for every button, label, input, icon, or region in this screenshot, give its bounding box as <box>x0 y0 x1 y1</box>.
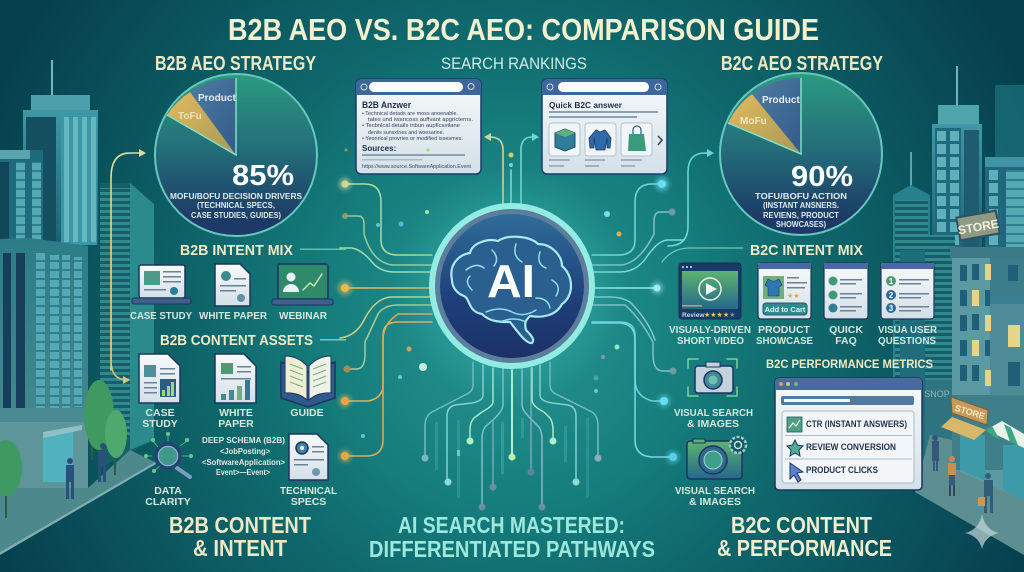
metric icon: CTR chart <box>787 417 802 432</box>
icon: quick FAQ card <box>824 263 868 319</box>
pie label: tofu: ToFu <box>178 111 202 122</box>
stat: 90%: 90% <box>791 161 853 193</box>
stat: 85%: 85% <box>232 160 294 192</box>
icon: case study laptop <box>132 265 191 304</box>
icon: white paper chart document <box>215 354 256 403</box>
footer: B2C content and performance: & PERFORMANCE <box>717 535 892 561</box>
answer bullets: • Tecbnlcal details inbun aupficsstlane <box>362 123 460 129</box>
slice: mofu <box>728 94 801 154</box>
right circuit traces <box>592 184 684 457</box>
icon: user questions card: 1 <box>889 277 894 286</box>
pie caption: MOFU/BOFU DECISION DRIVERS <box>170 192 303 201</box>
labels: B2B content assets: GUIDE <box>290 407 324 419</box>
arrow: to B2C strategy <box>668 149 714 246</box>
slice: product <box>752 78 801 154</box>
icon: case study document <box>139 354 180 403</box>
footer: AI search mastered <box>369 512 655 562</box>
left street trees and pedestrians <box>0 380 127 518</box>
pie caption: (TECHNICAL SPECS, <box>197 201 275 210</box>
labels: B2B content assets: WHITE <box>219 407 253 419</box>
icon: user questions card <box>881 263 934 319</box>
labels: visual search 2: & IMAGES <box>689 496 741 508</box>
answer bullets: tates und iwancoss auffvant apgricterns. <box>368 117 473 123</box>
labels: technical specs: TECHNICAL <box>280 485 338 497</box>
chart: B2C pie <box>720 73 882 235</box>
right city skyline <box>893 66 1024 555</box>
footer: AI search mastered: AI SEARCH MASTERED: <box>398 512 625 538</box>
labels: B2C intent mix: PRODUCT <box>758 324 811 336</box>
labels: visual search 1: & IMAGES <box>687 418 739 430</box>
labels: visual search 2 <box>675 485 755 508</box>
pie label: product: Product <box>198 93 236 104</box>
right storefront signs and awnings: STORE <box>957 217 1000 237</box>
icon: product showcase card <box>758 263 811 319</box>
labels: visual search 1: VISUAL SEARCH <box>674 407 753 419</box>
footer: AI search mastered: DIFFERENTIATED PATHWAYS <box>369 536 655 562</box>
hub ring <box>432 206 592 366</box>
sources heading: Sources: <box>362 144 396 153</box>
line: B2C intent rule <box>662 248 743 262</box>
left city skyline <box>0 60 156 555</box>
labels: B2C intent mix <box>669 324 937 347</box>
button label: Add to Cart <box>765 305 806 314</box>
arrow: to B2B strategy and content <box>111 149 146 384</box>
icon: guide open book <box>281 356 335 407</box>
answer bullets: • Technical detads are moss anoenable. <box>362 111 458 117</box>
panel heading: Quick B2C answer <box>549 100 623 110</box>
metric: product clicks: PRODUCT CLICKS <box>806 465 878 476</box>
footer: B2B content and intent: & INTENT <box>193 535 287 561</box>
icon: visual search camera with gear <box>687 437 746 479</box>
metric icon: review star <box>787 440 803 456</box>
footer: B2B content and intent: B2B CONTENT <box>169 512 311 538</box>
labels: B2B intent mix <box>130 310 327 322</box>
labels: B2B content assets: PAPER <box>218 418 254 430</box>
labels: technical specs <box>280 485 338 508</box>
labels: B2B content assets: STUDY <box>142 418 178 430</box>
answer bullets: deniis sunsxtnes and woesarine. <box>368 130 444 136</box>
labels: B2B intent mix: WHITE PAPER <box>199 310 267 322</box>
pie caption <box>755 192 847 229</box>
answer bullets <box>362 111 473 142</box>
heading: search rankings: SEARCH RANKINGS <box>441 54 587 73</box>
right storefront signs and awnings: STORE <box>954 403 986 421</box>
text: deep schema: DEEP SCHEMA (B2B) <box>202 435 285 445</box>
labels: B2C intent mix: QUESTIONS <box>878 335 936 347</box>
bottom circuit traces <box>425 362 598 507</box>
labels: B2B intent mix: CASE STUDY <box>130 310 192 322</box>
pie caption: REVIENS, PRODUCT <box>763 211 839 220</box>
data dashes <box>435 418 589 498</box>
footer: B2C content and performance <box>717 512 892 561</box>
labels: data clarity <box>145 485 191 508</box>
pie caption: SHOWCASES) <box>776 220 826 229</box>
panel heading: B2B Anzwer <box>362 100 411 110</box>
icon: webinar laptop <box>272 264 333 305</box>
icon: brain <box>451 237 571 343</box>
circuit nodes <box>338 148 679 510</box>
AI brain hub <box>394 168 630 404</box>
arrows: to search panels <box>484 133 539 205</box>
heading: B2B content assets: B2B CONTENT ASSETS <box>160 332 313 349</box>
labels: B2C intent mix: FAQ <box>835 335 857 347</box>
metric: review conversion: REVIEW CONVERSION <box>806 442 896 453</box>
labels: data clarity: CLARITY <box>145 496 191 508</box>
icon: short video player: ★★★★★ <box>704 311 735 319</box>
product tiles <box>549 123 652 156</box>
source link: https://www.source.SoftwareApplication.Event <box>362 164 471 170</box>
icon: product showcase card: ★★ <box>787 292 800 300</box>
icon: technical specs document <box>289 434 328 480</box>
icon: short video player <box>679 263 741 319</box>
text: deep schema: <SoftwareApplication> <box>202 458 285 467</box>
pie label: mofu: MoFu <box>740 116 767 127</box>
panel: B2B answer <box>356 79 481 174</box>
pie caption: TOFU/BOFU ACTION <box>755 192 847 201</box>
heading: B2C intent mix: B2C INTENT MIX <box>750 242 863 259</box>
chart: B2B pie <box>155 74 317 236</box>
pie caption <box>170 192 303 220</box>
icon: sparkle watermark <box>965 514 999 549</box>
icon: visual search camera <box>688 359 737 396</box>
pie caption: (INSTANT ANSNERS. <box>763 201 839 210</box>
labels: data clarity: DATA <box>154 485 182 497</box>
labels: visual search 2: VISUAL SEARCH <box>675 485 755 497</box>
footer: B2C content and performance: B2C CONTENT <box>731 512 872 538</box>
panel: quick B2C answer <box>542 79 667 174</box>
pie label: product: Product <box>762 95 800 106</box>
labels: B2C intent mix: QUICK <box>829 324 863 336</box>
panel: B2C metrics window <box>775 378 922 490</box>
icon: user questions card: 3 <box>889 304 894 313</box>
slice: tofu <box>167 92 236 155</box>
footer: B2B content and intent <box>169 512 311 561</box>
icon: data clarity magnifier <box>144 432 193 477</box>
text: deep schema <box>202 435 285 477</box>
main title: B2B AEO VS. B2C AEO: COMPARISON GUIDE <box>228 12 819 47</box>
labels: B2B content assets <box>142 407 324 430</box>
video rating: Review <box>682 312 705 319</box>
slice: product <box>190 78 236 155</box>
left circuit traces <box>340 184 432 456</box>
metric: CTR: CTR (INSTANT ANSWERS) <box>806 419 907 430</box>
labels: B2B content assets: CASE <box>145 407 175 419</box>
labels: B2B intent mix: WEBINAR <box>279 310 327 322</box>
heading: B2C AEO strategy: B2C AEO STRATEGY <box>721 53 884 75</box>
heading: B2B intent mix: B2B INTENT MIX <box>180 242 293 259</box>
labels: B2C intent mix: SHOWCASE <box>756 335 813 347</box>
right storefront signs and awnings: SNOP <box>924 389 950 399</box>
text: deep schema: <JobPosting> <box>220 447 270 456</box>
labels: B2C intent mix: SHORT VIDEO <box>677 335 744 347</box>
pie caption: CASE STUDIES, GUIDES) <box>191 211 281 220</box>
icon: white paper document <box>215 264 250 306</box>
heading: B2C performance metrics: B2C PERFORMANCE METRICS <box>766 357 933 371</box>
answer bullets: • Yeonrical provries or modified issesmes. <box>362 136 463 142</box>
metric icon: cursor <box>790 463 803 482</box>
labels: B2C intent mix: VISUA USER <box>878 324 937 336</box>
right storefront signs and awnings <box>924 211 1024 513</box>
label: AI: AI <box>487 255 535 307</box>
text: deep schema: Event>—Event> <box>216 468 270 477</box>
labels: technical specs: SPECS <box>291 496 326 508</box>
heading: B2B AEO strategy: B2B AEO STRATEGY <box>155 53 317 75</box>
icon: user questions card: 2 <box>889 291 894 300</box>
labels: B2C intent mix: VISUALY-DRIVEN <box>669 324 751 336</box>
labels: visual search 1 <box>674 407 753 430</box>
